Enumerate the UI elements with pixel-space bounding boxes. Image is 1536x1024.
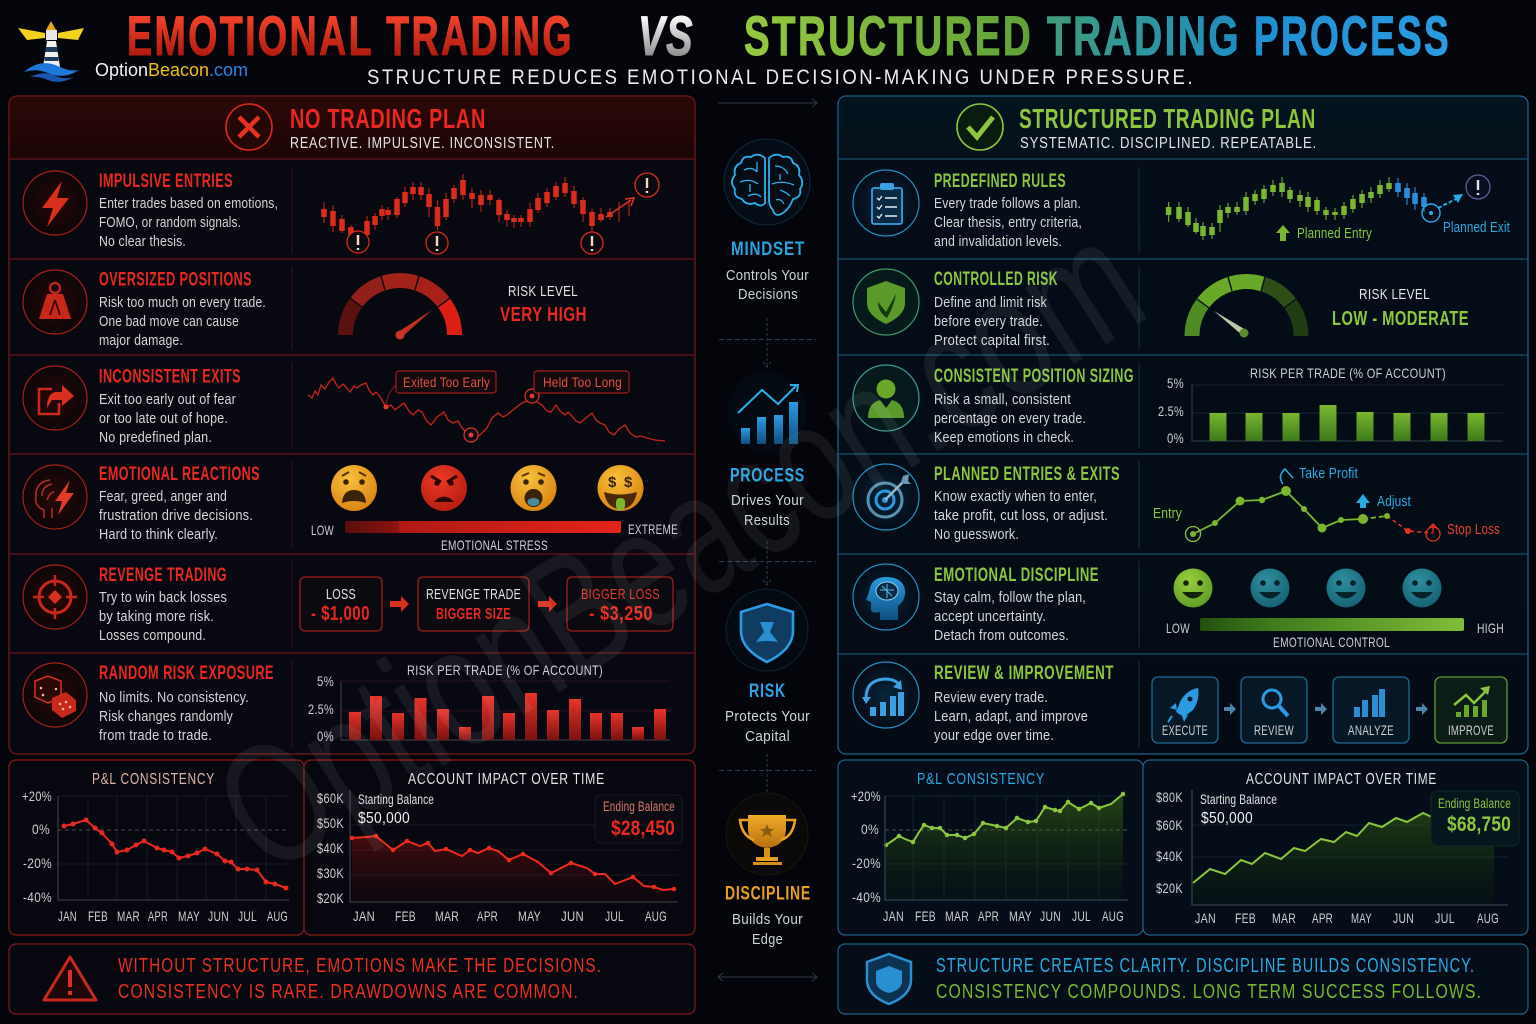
ending balance: Ending Balance <box>1438 796 1511 811</box>
emotional stress bar <box>311 521 678 553</box>
arrow <box>538 596 557 612</box>
step: mindset: MINDSET <box>731 239 805 260</box>
row: emotional reactions: Hard to think clearly. <box>99 526 218 543</box>
panel: green account impact: APR <box>1312 910 1333 926</box>
emotional stress bar: EMOTIONAL STRESS <box>441 537 548 553</box>
step: risk: Protects Your <box>725 708 810 725</box>
panel: red account impact <box>304 760 695 935</box>
row: inconsistent exits: Exit too early out of fear <box>99 391 236 408</box>
panel: green P&L consistency: APR <box>978 908 999 924</box>
panel: red P&L consistency: AUG <box>267 908 288 924</box>
title: EMOTIONAL TRADING <box>127 4 574 67</box>
row: impulsive entries <box>23 171 659 254</box>
callout: held too long <box>534 371 629 393</box>
subtitle: STRUCTURE REDUCES EMOTIONAL DECISION-MAKING UNDER PRESSURE. <box>367 66 1195 89</box>
chart: planned candlesticks: Planned Entry <box>1297 226 1372 242</box>
panel: green account impact: FEB <box>1235 910 1256 926</box>
flow box: execute <box>1152 677 1218 743</box>
row: review and improvement: Review every trade. <box>934 689 1048 706</box>
flow box: analyze: ANALYZE <box>1348 722 1394 738</box>
row: inconsistent exits: No predefined plan. <box>99 429 212 446</box>
area chart: rising P&L <box>885 794 1128 900</box>
row: consistent position sizing <box>853 365 1503 446</box>
row: random risk exposure: RANDOM RISK EXPOSURE <box>99 663 274 684</box>
panel header: no trading plan: NO TRADING PLAN <box>290 103 486 134</box>
emotional control bar: HIGH <box>1477 620 1504 636</box>
row: emotional reactions <box>23 464 678 553</box>
row: revenge trading: by taking more risk. <box>99 608 214 625</box>
flow box: improve: IMPROVE <box>1448 722 1494 738</box>
panel: green P&L consistency: JUN <box>1040 908 1061 924</box>
icon: person <box>853 365 919 431</box>
panel: green P&L consistency: -40% <box>852 889 881 905</box>
panel: green account impact: ACCOUNT IMPACT OVER TIME <box>1246 771 1437 788</box>
panel: red account impact: FEB <box>395 908 416 924</box>
row: review and improvement: REVIEW & IMPROVEMENT <box>934 663 1114 684</box>
bar chart: random risk per trade: 0% <box>317 728 334 744</box>
step: mindset: Decisions <box>738 286 798 303</box>
step: discipline: DISCIPLINE <box>725 884 811 904</box>
title: TRADING <box>1047 4 1241 67</box>
row: predefined rules: PREDEFINED RULES <box>934 171 1066 192</box>
row: emotional discipline <box>853 564 1504 650</box>
row: revenge trading: Try to win back losses <box>99 589 227 606</box>
chart: planned trade path: Adjust <box>1377 494 1411 510</box>
icon: lighthouse <box>18 21 84 82</box>
panel: red account impact: AUG <box>645 908 667 924</box>
callout: exited too early <box>396 371 496 393</box>
step: mindset <box>724 139 810 303</box>
icon: fearful emoji <box>331 465 377 511</box>
row: revenge trading: REVENGE TRADING <box>99 565 227 586</box>
panel: green account impact: $40K <box>1156 848 1183 864</box>
step: discipline: Builds Your <box>732 911 803 928</box>
center column <box>718 99 817 981</box>
row: oversized positions: major damage. <box>99 332 183 349</box>
step: process <box>727 372 807 529</box>
row: impulsive entries: No clear thesis. <box>99 233 186 250</box>
row: planned entries and exits: take profit, cut loss, or adjust. <box>934 507 1108 524</box>
step: risk <box>725 589 810 745</box>
panel: green account impact: $80K <box>1156 789 1183 805</box>
gauge: low moderate risk <box>1192 277 1301 338</box>
bar chart: consistent risk: 0% <box>1167 430 1184 446</box>
arrow <box>1315 703 1327 715</box>
panel: red account impact: MAY <box>518 908 541 924</box>
step: process: PROCESS <box>730 466 805 486</box>
panel: red account impact: MAR <box>435 908 459 924</box>
panel: green P&L consistency: AUG <box>1102 908 1124 924</box>
icon: green check <box>957 104 1003 150</box>
row: emotional discipline: Stay calm, follow the plan, <box>934 589 1086 606</box>
chart: planned candlesticks <box>1169 175 1510 242</box>
ending balance <box>1431 791 1519 846</box>
panel header: structured trading plan: STRUCTURED TRADING PLAN <box>1019 103 1316 134</box>
panel: red P&L consistency: JUN <box>208 908 229 924</box>
callout: held too long: Held Too Long <box>543 374 622 390</box>
panel: red P&L consistency: +20% <box>22 788 52 804</box>
bar chart: consistent risk: RISK PER TRADE (% OF ACCOUNT) <box>1250 365 1446 381</box>
panel: red account impact: $60K <box>317 790 344 806</box>
chart: planned trade path: Entry <box>1153 506 1182 522</box>
panel header: structured trading plan <box>839 97 1527 158</box>
panel header: no trading plan <box>10 97 694 158</box>
icon: cycle chart <box>853 662 919 728</box>
panel: red account impact: JUN <box>561 908 584 924</box>
flow box: loss: LOSS <box>326 586 356 603</box>
bar chart: consistent risk: 5% <box>1167 375 1184 391</box>
line chart: falling P&L <box>64 820 286 888</box>
icon: money-eyes emoji: $ <box>624 474 633 491</box>
title <box>127 4 1451 67</box>
bar chart: random risk per trade: RISK PER TRADE (% OF ACCOUNT) <box>407 662 603 678</box>
starting balance <box>358 792 434 827</box>
panel: red account impact: $20K <box>317 890 344 906</box>
panel: green account impact: MAR <box>1272 910 1296 926</box>
icon: head with brain <box>853 564 919 630</box>
panel: red P&L consistency: -40% <box>23 889 52 905</box>
row: predefined rules <box>853 170 1510 250</box>
row: emotional discipline: Detach from outcomes. <box>934 627 1069 644</box>
panel: no trading plan <box>9 96 695 754</box>
panel: green P&L consistency: JUL <box>1072 908 1091 924</box>
row: random risk exposure: No limits. No consistency. <box>99 689 249 706</box>
icon: head with bolt <box>23 465 87 529</box>
row: oversized positions: Risk too much on every trade. <box>99 294 266 311</box>
panel: red P&L consistency: JUL <box>238 908 257 924</box>
chart: planned candlesticks: Planned Exit <box>1443 220 1510 236</box>
arrow down <box>763 318 771 367</box>
panel: structure banner <box>838 944 1528 1014</box>
panel: red P&L consistency: JAN <box>58 908 77 924</box>
ending balance: Ending Balance <box>603 799 675 814</box>
icon: trophy <box>726 793 808 875</box>
flow box: revenge trade <box>418 577 529 631</box>
panel: warning banner: CONSISTENCY IS RARE. DRAWDOWNS ARE COMMON. <box>118 981 579 1003</box>
panel: green account impact: JAN <box>1195 910 1216 926</box>
callout: exited too early: Exited Too Early <box>403 374 490 390</box>
row: oversized positions <box>23 270 587 349</box>
step: discipline <box>725 793 811 948</box>
flow box: loss <box>300 577 382 631</box>
icon: money-eyes emoji: $ <box>608 474 617 491</box>
row: random risk exposure <box>23 662 670 744</box>
row: emotional discipline: EMOTIONAL DISCIPLINE <box>934 565 1099 586</box>
step: mindset: Controls Your <box>726 267 809 284</box>
row: controlled risk: before every trade. <box>934 313 1043 330</box>
risk level label <box>500 283 587 326</box>
row: emotional reactions: Fear, greed, anger and <box>99 488 227 505</box>
title: VS <box>638 4 694 67</box>
arrow bottom <box>718 973 817 981</box>
risk level label: RISK LEVEL <box>1359 286 1430 303</box>
panel: green account impact <box>1143 760 1528 935</box>
panel: green P&L consistency: MAY <box>1009 908 1032 924</box>
row: predefined rules: Every trade follows a plan. <box>934 195 1081 212</box>
panel: green account impact: AUG <box>1477 910 1499 926</box>
row: revenge trading <box>23 565 673 644</box>
icon: crying emoji <box>510 465 556 511</box>
panel: red P&L consistency <box>9 760 304 935</box>
panel: green P&L consistency: JAN <box>883 908 904 924</box>
icon: teal smile 2 <box>1326 568 1366 608</box>
step: risk: RISK <box>749 681 786 702</box>
icon: dice <box>23 663 87 727</box>
panel: red P&L consistency: FEB <box>88 908 108 924</box>
starting balance: Starting Balance <box>1200 792 1277 807</box>
panel: green P&L consistency: -20% <box>852 855 881 871</box>
chart: red candlesticks <box>324 173 659 254</box>
icon: shield <box>726 589 808 671</box>
arrow down <box>763 541 771 585</box>
ending balance: $28,450 <box>611 817 675 840</box>
panel: green P&L consistency: FEB <box>915 908 936 924</box>
starting balance: $50,000 <box>1201 810 1253 827</box>
panel: warning banner <box>9 944 695 1014</box>
risk level label <box>1332 286 1469 330</box>
flow box: loss: - $1,000 <box>311 603 370 625</box>
panel: green account impact: $60K <box>1156 817 1183 833</box>
panel header: no trading plan: REACTIVE. IMPULSIVE. INCONSISTENT. <box>290 135 555 152</box>
arrow <box>1224 703 1236 715</box>
bar chart: random risk per trade: 5% <box>317 673 334 689</box>
row: planned entries and exits: No guesswork. <box>934 526 1019 543</box>
flow box: bigger loss <box>567 577 673 631</box>
row: controlled risk: CONTROLLED RISK <box>934 269 1058 290</box>
row: planned entries and exits <box>853 464 1500 543</box>
panel: red P&L consistency: APR <box>148 908 168 924</box>
icon: red X <box>226 104 272 150</box>
gauge: very high risk <box>346 276 454 340</box>
arrow down <box>763 754 771 798</box>
row: random risk exposure: from trade to trade. <box>99 727 212 744</box>
icon: crosshair <box>23 565 87 629</box>
row: oversized positions: OVERSIZED POSITIONS <box>99 270 252 290</box>
flow box: analyze <box>1333 677 1409 743</box>
icon: money-eyes emoji <box>598 465 644 511</box>
emotional stress bar: LOW <box>311 522 334 538</box>
panel: red P&L consistency: -20% <box>23 855 52 871</box>
panel: green P&L consistency <box>838 760 1143 935</box>
flow box: bigger loss: BIGGER LOSS <box>581 586 660 603</box>
step: risk: Capital <box>745 728 790 745</box>
flow box: improve <box>1435 677 1507 743</box>
row: controlled risk <box>853 269 1469 349</box>
row: revenge trading: Losses compound. <box>99 627 206 644</box>
icon: green shield <box>853 269 919 335</box>
ending balance <box>595 795 682 843</box>
starting balance: $50,000 <box>358 810 410 827</box>
row: consistent position sizing: Keep emotions in check. <box>934 429 1074 446</box>
row: controlled risk: Define and limit risk <box>934 294 1047 311</box>
logo wordmark: OptionBeacon.com <box>95 60 248 80</box>
row: predefined rules: and invalidation levels. <box>934 233 1062 250</box>
starting balance <box>1200 792 1277 827</box>
row: emotional reactions: frustration drive decisions. <box>99 507 253 524</box>
starting balance: Starting Balance <box>358 792 434 807</box>
row: review and improvement <box>853 662 1507 744</box>
row: planned entries and exits: Know exactly when to enter, <box>934 488 1097 505</box>
panel: warning banner: WITHOUT STRUCTURE, EMOTIONS MAKE THE DECISIONS. <box>118 955 602 977</box>
arrow <box>390 596 409 612</box>
row: review and improvement: Learn, adapt, and improve <box>934 708 1088 725</box>
emotional control bar <box>1166 618 1504 650</box>
panel: red account impact: $30K <box>317 865 344 881</box>
row: random risk exposure: Risk changes randomly <box>99 708 233 725</box>
row: oversized positions: One bad move can cause <box>99 313 239 330</box>
panel: green account impact: JUN <box>1393 910 1414 926</box>
risk level label: LOW - MODERATE <box>1332 308 1469 330</box>
chart: erratic exit line <box>308 371 665 442</box>
panel: red P&L consistency: 0% <box>32 821 50 837</box>
panel: red account impact: JAN <box>353 908 375 924</box>
icon: angry emoji <box>421 465 467 511</box>
icon: brain <box>724 139 810 225</box>
panel: structured trading plan <box>838 96 1528 754</box>
icon: blue shield <box>867 954 911 1004</box>
bar chart: random risk per trade <box>308 662 670 744</box>
title: STRUCTURED <box>744 4 1033 67</box>
step: process: Results <box>744 512 790 529</box>
icon: teal smile 3 <box>1402 568 1442 608</box>
icon: clipboard <box>853 170 919 236</box>
step: discipline: Edge <box>752 931 783 948</box>
row: impulsive entries: FOMO, or random signals. <box>99 214 241 231</box>
bar chart: consistent risk: 2.5% <box>1158 403 1184 419</box>
emotional stress bar: EXTREME <box>628 521 678 537</box>
arrow <box>1416 703 1428 715</box>
panel: red account impact: APR <box>477 908 498 924</box>
flow box: execute: EXECUTE <box>1162 722 1208 738</box>
panel: green P&L consistency: MAR <box>945 908 969 924</box>
icon: lime smile <box>1174 568 1212 608</box>
flow box: revenge trade: REVENGE TRADE <box>426 586 521 603</box>
icon: lightning bolt <box>23 171 87 235</box>
panel: red P&L consistency: MAR <box>117 908 140 924</box>
flow box: review <box>1241 677 1307 743</box>
row: consistent position sizing: percentage on every trade. <box>934 410 1086 427</box>
panel: red account impact: $50K <box>317 815 344 831</box>
icon: weight <box>23 270 87 334</box>
panel: red P&L consistency: P&L CONSISTENCY <box>92 771 215 788</box>
icon: teal smile 1 <box>1250 568 1290 608</box>
risk level label: RISK LEVEL <box>508 283 578 300</box>
flow box: review: REVIEW <box>1254 722 1294 738</box>
panel: green P&L consistency: 0% <box>861 821 879 837</box>
row: controlled risk: Protect capital first. <box>934 332 1050 349</box>
row: consistent position sizing: Risk a small, consistent <box>934 391 1072 408</box>
flow box: revenge trade: BIGGER SIZE <box>436 606 511 623</box>
row: impulsive entries: Enter trades based on emotions, <box>99 195 278 212</box>
panel: green P&L consistency: P&L CONSISTENCY <box>917 771 1045 788</box>
emotional control bar: LOW <box>1166 620 1190 636</box>
row: inconsistent exits: or too late out of hope. <box>99 410 228 427</box>
arrow top <box>718 99 817 107</box>
panel header: structured trading plan: SYSTEMATIC. DISCIPLINED. REPEATABLE. <box>1020 135 1317 152</box>
area chart: growing balance <box>1193 800 1494 905</box>
panel: red P&L consistency: MAY <box>178 908 200 924</box>
flow box: bigger loss: - $3,250 <box>589 603 653 625</box>
step: process: Drives Your <box>731 492 804 509</box>
panel: green account impact: MAY <box>1351 910 1372 926</box>
icon: warning triangle <box>44 957 96 1000</box>
row: inconsistent exits <box>23 366 665 446</box>
row: inconsistent exits: INCONSISTENT EXITS <box>99 366 241 388</box>
panel: green account impact: $20K <box>1156 880 1183 896</box>
panel: green P&L consistency: +20% <box>851 788 881 804</box>
chart: planned trade path: Stop Loss <box>1447 522 1500 538</box>
header logo <box>18 21 248 82</box>
row: predefined rules: Clear thesis, entry criteria, <box>934 214 1082 231</box>
row: consistent position sizing: CONSISTENT POSITION SIZING <box>934 366 1134 387</box>
area chart: declining balance <box>352 836 674 902</box>
row: impulsive entries: IMPULSIVE ENTRIES <box>99 171 233 192</box>
chart: planned trade path: Take Profit <box>1299 466 1358 482</box>
bar chart: consistent risk <box>1158 365 1503 446</box>
panel: green account impact: JUL <box>1435 910 1455 926</box>
row: emotional reactions: EMOTIONAL REACTIONS <box>99 464 260 485</box>
panel: red account impact: JUL <box>605 908 624 924</box>
panel: red account impact: $40K <box>317 840 344 856</box>
icon: rising chart <box>727 372 807 452</box>
ending balance: $68,750 <box>1447 813 1511 836</box>
row: emotional discipline: accept uncertainty. <box>934 608 1046 625</box>
risk level label: VERY HIGH <box>500 304 587 326</box>
panel: red account impact: ACCOUNT IMPACT OVER TIME <box>408 771 605 788</box>
chart: planned trade path <box>1153 466 1500 542</box>
emotional control bar: EMOTIONAL CONTROL <box>1273 634 1390 650</box>
bar chart: random risk per trade: 2.5% <box>308 701 334 717</box>
row: planned entries and exits: PLANNED ENTRIES & EXITS <box>934 464 1120 485</box>
icon: bullseye <box>853 464 919 530</box>
icon: exit arrow <box>23 366 87 430</box>
row: review and improvement: your edge over time. <box>934 727 1054 744</box>
